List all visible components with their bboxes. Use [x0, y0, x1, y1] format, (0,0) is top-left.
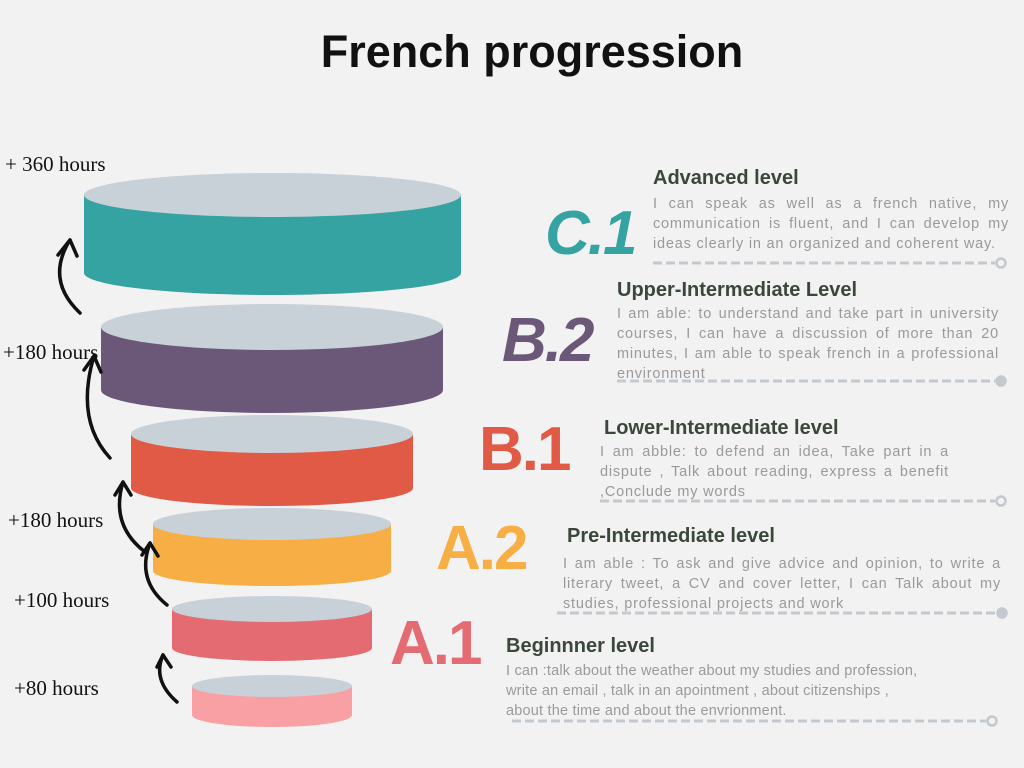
- cylinder B1: [131, 415, 413, 506]
- text: B2: Upper-Intermediate Level: [617, 279, 857, 301]
- hours labels: + 360 hours: [5, 152, 106, 176]
- text: +180 hours: [8, 508, 103, 532]
- title: French progression: [321, 26, 743, 77]
- text: +180 hours: [3, 340, 98, 364]
- text: A.2: [436, 514, 526, 583]
- text: A2: [563, 525, 1001, 612]
- text: B.1: [479, 415, 569, 484]
- text: B2: I am able: to understand and take part in university courses, I can have a discussion of more than 20 minutes, I am able to speak french in a professional environment: [617, 306, 999, 382]
- text: C1: I can speak as well as a french native, my communication is fluent, and I can develop my ideas clearly in an organized and coherent way.: [653, 196, 1009, 252]
- text: A1: about the time and about the envrionment.: [506, 703, 787, 719]
- text: B.2: [502, 306, 592, 375]
- text: A1: [506, 635, 917, 719]
- cylinder A0: [192, 675, 352, 727]
- level letters: C.1: [545, 199, 635, 268]
- text: A1: Beginnner level: [506, 635, 655, 657]
- text: A2: Pre-Intermediate level: [567, 525, 775, 547]
- cylinder C1: [84, 173, 461, 295]
- dashed lines: [512, 263, 996, 721]
- text: C1: Advanced level: [653, 167, 799, 189]
- text: A1: write an email , talk in an apointment , about citizenships ,: [506, 683, 889, 699]
- text: B1: [600, 417, 949, 500]
- text: B1: I am abble: to defend an idea, Take part in a dispute , Talk about reading, express a benefit ,Conclude my words: [600, 444, 949, 500]
- text: +80 hours: [14, 676, 99, 700]
- text: +100 hours: [14, 588, 109, 612]
- text: B1: Lower-Intermediate level: [604, 417, 839, 439]
- cylinder B2: [101, 304, 443, 413]
- text: C1: [653, 167, 1009, 252]
- text: A1: I can :talk about the weather about my studies and profession,: [506, 663, 917, 679]
- arrows: [58, 240, 177, 702]
- text: A.1: [390, 609, 480, 678]
- text: A2: I am able : To ask and give advice and opinion, to write a literary tweet, a CV and cover letter, I can Talk about my studies, professional projects and work: [563, 556, 1001, 612]
- cylinder A2: [153, 508, 391, 586]
- cylinder A1: [172, 596, 372, 661]
